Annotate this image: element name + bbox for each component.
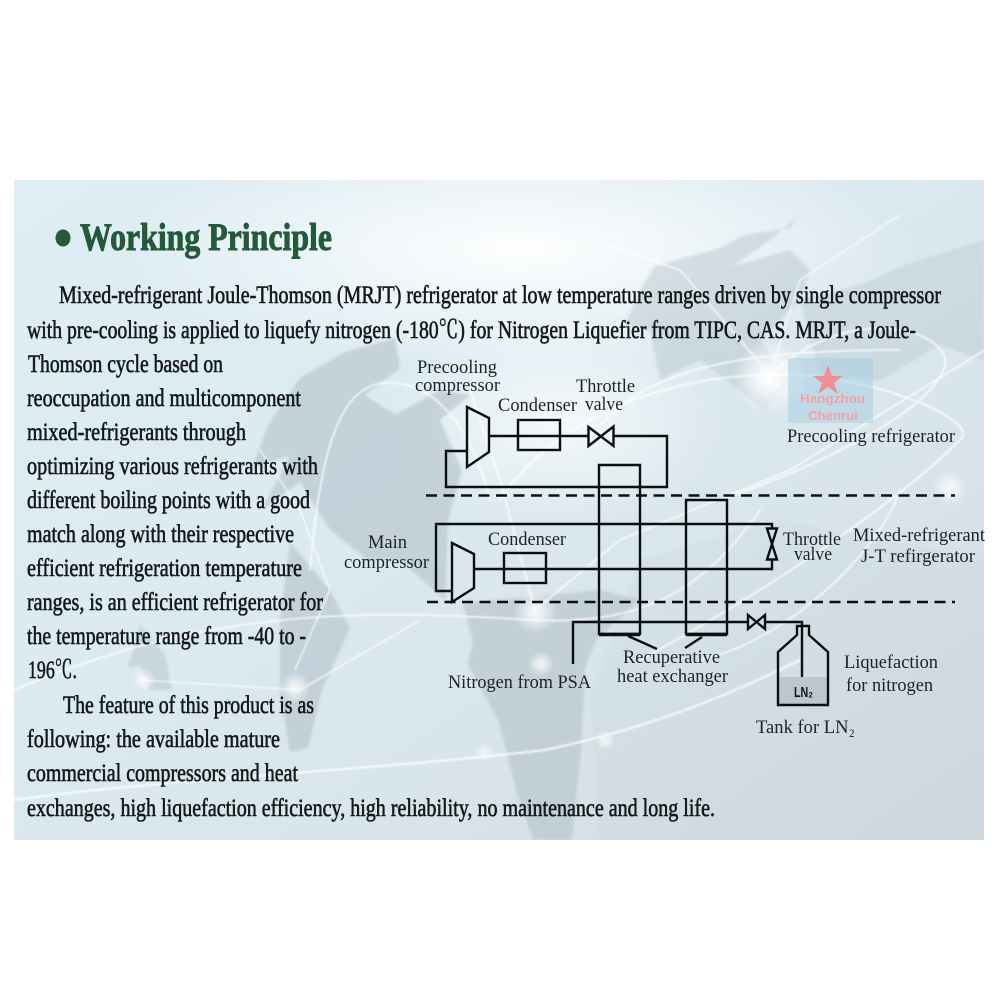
heading: Working Principle: Working Principle [80,216,332,259]
text block: description: optimizing various refrigerants with [27,453,318,480]
text block: description [27,282,942,822]
diagram labels: valve [794,544,832,565]
nitrogen line [573,622,802,677]
diagram labels [344,357,986,738]
text block: description: The feature of this product is as [63,692,314,719]
diagram labels: Main [368,532,407,553]
diagram labels: Nitrogen from PSA [448,672,591,693]
panel: world map background [14,130,985,840]
text block: description: ranges, is an efficient refrigerator for [27,589,324,616]
precooling loop [446,407,667,487]
diagram labels: J-T refirgerator [861,546,976,567]
heat exchanger 1 [599,465,640,634]
diagram labels: for nitrogen [846,675,933,696]
icon: main compressor [452,543,474,602]
icon: precooling condenser [518,420,560,450]
diagram labels: Condenser [498,395,578,416]
text block: description: reoccupation and multicomponent [27,385,301,412]
icon: main throttle valve [767,528,777,560]
main loop [436,524,777,602]
diagram labels: Recuperative [623,647,720,668]
icon: heading bullet [56,230,70,246]
heat exchanger bases [599,633,727,636]
diagram labels: Throttle [576,376,635,397]
icon: watermark star [813,365,843,394]
watermark: Hangzhou Chenrui [788,358,873,423]
diagram labels: compressor [415,375,501,396]
diagram labels: Condenser [488,529,567,550]
diagram labels: Precooling [417,357,497,378]
diagram labels: Mixed-refrigerant [853,525,986,546]
text block: description: different boiling points with a good [27,487,310,514]
text block: description: exchanges, high liquefaction efficiency, high reliability, no maintenance and long life. [27,795,715,822]
icon: LN2 tank [778,626,828,705]
chart: refrigeration cycle diagram [426,407,955,705]
diagram labels: Liquefaction [844,652,938,673]
text block: description: following: the available mature [27,726,280,753]
icon: precooling compressor [467,407,489,467]
diagram labels: compressor [344,552,430,573]
icon: nitrogen valve [748,615,765,629]
text block: description: efficient refrigeration temperature [27,555,302,582]
diagram labels: valve [585,394,623,415]
diagram labels: heat exchanger [617,666,729,687]
watermark: Hangzhou Chenrui: Chenrui [808,408,858,423]
text block: description: Thomson cycle based on [28,351,223,378]
leader lines [628,636,702,649]
icon: LN2 tank: LN₂ [794,684,813,701]
diagram labels: Throttle [783,529,841,550]
diagram labels: Tank for LN₂ [756,717,855,738]
dashed separators [426,496,955,602]
icon: precooling throttle valve [588,426,614,446]
diagram labels: Precooling refrigerator [787,426,956,447]
text block: description: match along with their respective [27,521,294,548]
watermark: Hangzhou Chenrui: Hangzhou [800,391,865,406]
text block: description: the temperature range from -40 to - [27,623,306,650]
text block: description: mixed-refrigerants through [27,419,246,446]
icon: main condenser [504,553,546,583]
text block: description: commercial compressors and heat [27,760,298,787]
heat exchanger 2 [686,500,727,634]
text block: description: 196℃. [28,657,77,684]
